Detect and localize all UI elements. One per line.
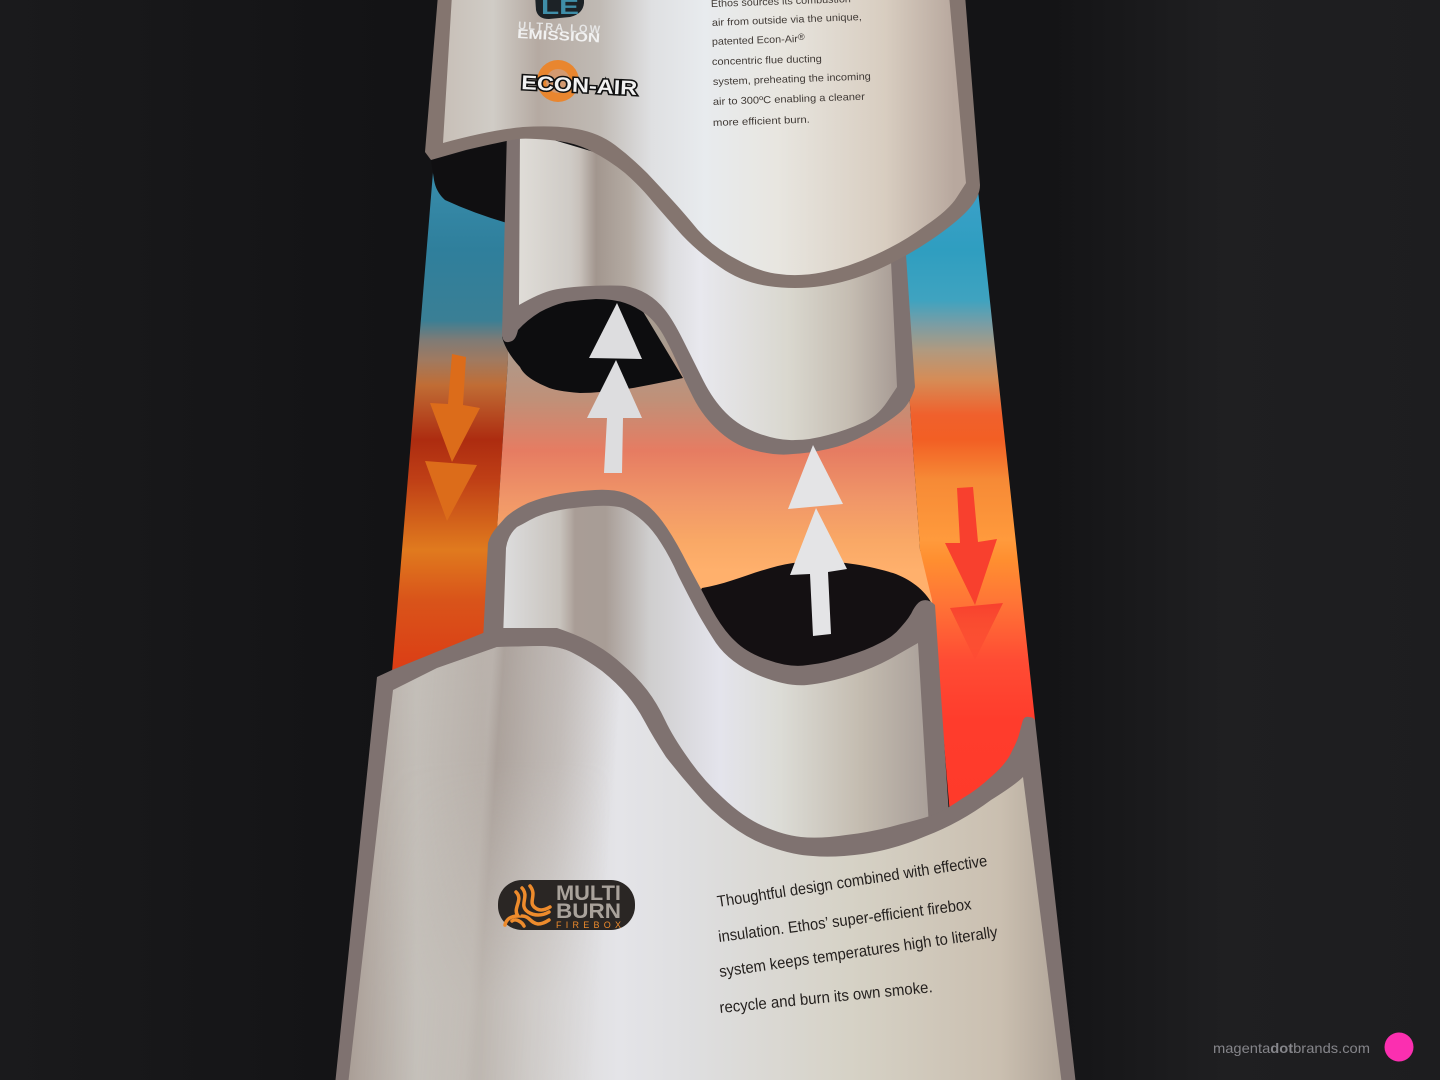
arrow: white up, left: [587, 303, 642, 473]
Econ-Air body copy: system, preheating the incoming: [713, 71, 871, 88]
panel: bottom with Multi Burn copy: [335, 628, 1076, 1080]
Econ-Air body copy: concentric flue ducting: [712, 54, 822, 68]
Multi Burn Firebox logo: MULTI: [556, 882, 621, 905]
Econ-Air body copy: patented Econ-Air: [712, 34, 799, 48]
panel: top with Econ-Air copy: [425, 0, 980, 288]
Multi Burn Firebox logo: BURN: [556, 900, 621, 923]
Multi Burn body copy: [716, 853, 999, 1017]
black blob: top left: [431, 140, 509, 223]
icon: magenta dot: [1384, 1032, 1414, 1062]
Multi Burn Firebox logo: [498, 880, 635, 930]
right gradient column: [905, 190, 1035, 815]
Econ-Air body copy: ®: [798, 32, 805, 42]
black blob: centre right: [695, 561, 932, 668]
Multi Burn body copy: insulation. Ethos’ super-efficient firebox: [717, 896, 972, 946]
arrow: orange down, left column: [425, 354, 480, 521]
Econ-Air body copy: more efficient burn.: [713, 115, 810, 129]
Multi Burn body copy: Thoughtful design combined with effective: [716, 853, 989, 911]
arrow: red down, right column: [945, 487, 1003, 660]
panel: lower wave: [483, 490, 952, 860]
ultra low emission label: [517, 20, 601, 45]
Econ-Air logo: ECON-AIR: [521, 72, 638, 100]
Econ-Air body copy: air to 300ºC enabling a cleaner: [713, 92, 866, 108]
LE logo: [535, 0, 584, 19]
Econ-Air logo: [521, 60, 638, 102]
Multi Burn body copy: system keeps temperatures high to literally: [718, 924, 999, 981]
watermark: magentadotbrands.com: [1213, 1040, 1370, 1056]
watermark: [1213, 1032, 1414, 1062]
ultra low emission label: ULTRA LOW: [518, 20, 601, 36]
Econ-Air body copy: air from outside via the unique,: [712, 12, 862, 29]
Econ-Air body copy: [711, 0, 871, 129]
icon: flame: [505, 886, 550, 926]
arrow: white up, right: [788, 445, 847, 636]
Multi Burn Firebox logo: FIREBOX: [556, 920, 621, 930]
centre gradient column: [497, 300, 945, 640]
left gradient column: [392, 140, 510, 672]
ultra low emission label: EMISSION: [517, 26, 601, 45]
Multi Burn body copy: recycle and burn its own smoke.: [719, 979, 933, 1017]
black blob: centre left: [502, 290, 683, 393]
panel: upper wave: [502, 130, 915, 455]
